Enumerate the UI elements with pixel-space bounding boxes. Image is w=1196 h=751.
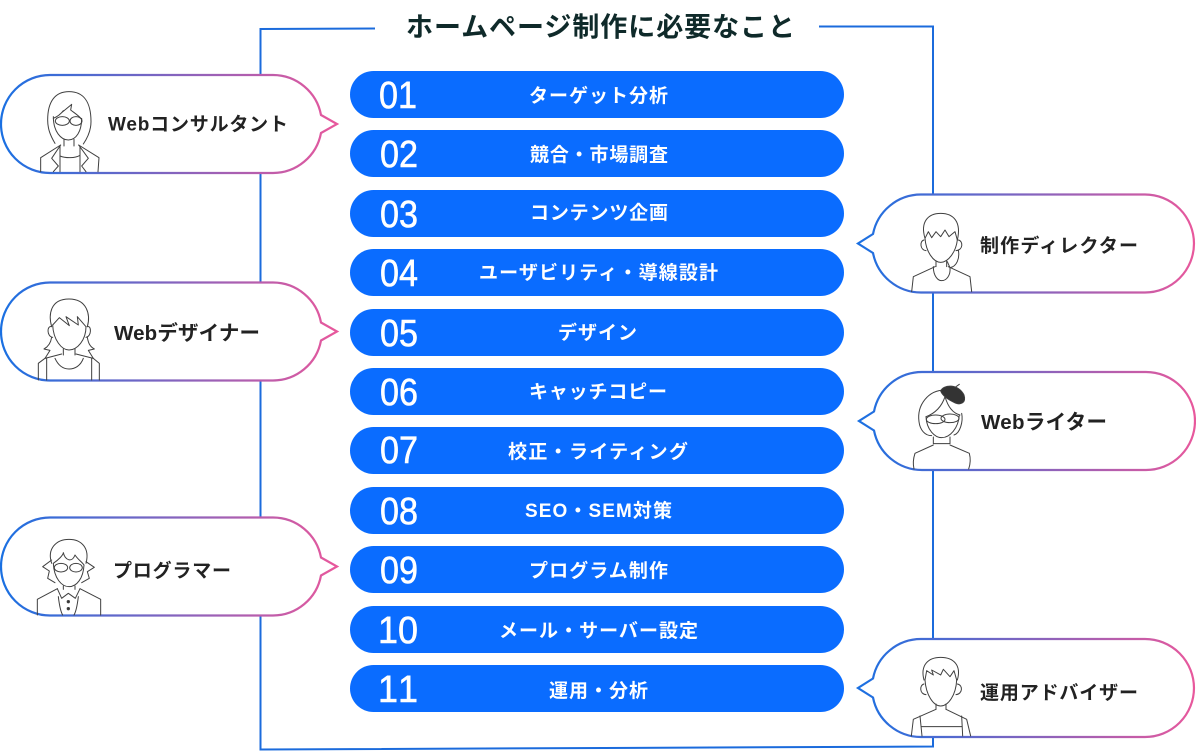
item 10: メール・サーバー設定 — [499, 620, 698, 642]
list of tasks — [350, 71, 844, 712]
icon: consultant — [41, 92, 99, 172]
item 04 — [350, 249, 844, 296]
item 05 — [350, 309, 844, 356]
label: Webデザイナー — [114, 321, 260, 345]
item 11 — [350, 665, 844, 712]
item 11: 運用・分析 — [549, 680, 648, 702]
item 08 — [350, 487, 844, 534]
item 10: 10 — [378, 610, 418, 652]
icon: writer — [913, 384, 970, 469]
item 09: プログラム制作 — [529, 559, 668, 582]
item 07 — [350, 427, 844, 474]
icon: programmer — [37, 539, 101, 615]
item 05: デザイン — [558, 321, 637, 344]
icon: director — [912, 213, 972, 292]
bubble: production director — [858, 194, 1194, 292]
item 04: 04 — [380, 253, 418, 295]
label: 制作ディレクター — [980, 234, 1138, 257]
title: ホームページ制作に必要なこと — [406, 12, 795, 42]
item 02: 02 — [380, 134, 418, 176]
item 10 — [350, 606, 844, 653]
item 01 — [350, 71, 844, 118]
item 03 — [350, 190, 844, 237]
icon: adviser — [911, 657, 971, 736]
item 08: 08 — [380, 491, 418, 533]
item 06 — [350, 368, 844, 415]
item 02 — [350, 130, 844, 177]
item 02: 競合・市場調査 — [530, 144, 668, 166]
item 06: 06 — [380, 372, 418, 414]
item 08: SEO・SEM対策 — [525, 500, 672, 522]
label: 運用アドバイザー — [980, 682, 1138, 704]
label: プログラマー — [113, 559, 231, 582]
bubble: Web consultant — [1, 75, 337, 173]
item 09: 09 — [380, 550, 418, 592]
item 09 — [350, 546, 844, 593]
bubble: programmer — [1, 518, 337, 616]
bubble: Web writer — [859, 372, 1195, 470]
item 01: ターゲット分析 — [529, 85, 668, 107]
item 03: コンテンツ企画 — [530, 202, 668, 224]
item 01: 01 — [379, 75, 417, 117]
item 07: 校正・ライティング — [508, 440, 688, 463]
item 03: 03 — [380, 194, 418, 236]
item 05: 05 — [380, 313, 418, 355]
item 06: キャッチコピー — [529, 381, 667, 403]
bubble: Web designer — [1, 282, 337, 380]
item 04: ユーザビリティ・導線設計 — [479, 261, 718, 284]
item 11: 11 — [378, 669, 418, 711]
label: Webライター — [981, 411, 1107, 434]
frame line — [260, 26, 933, 750]
icon: designer — [38, 299, 99, 380]
bubble: operations adviser — [858, 639, 1194, 737]
item 07: 07 — [380, 430, 418, 472]
label: Webコンサルタント — [108, 114, 288, 136]
